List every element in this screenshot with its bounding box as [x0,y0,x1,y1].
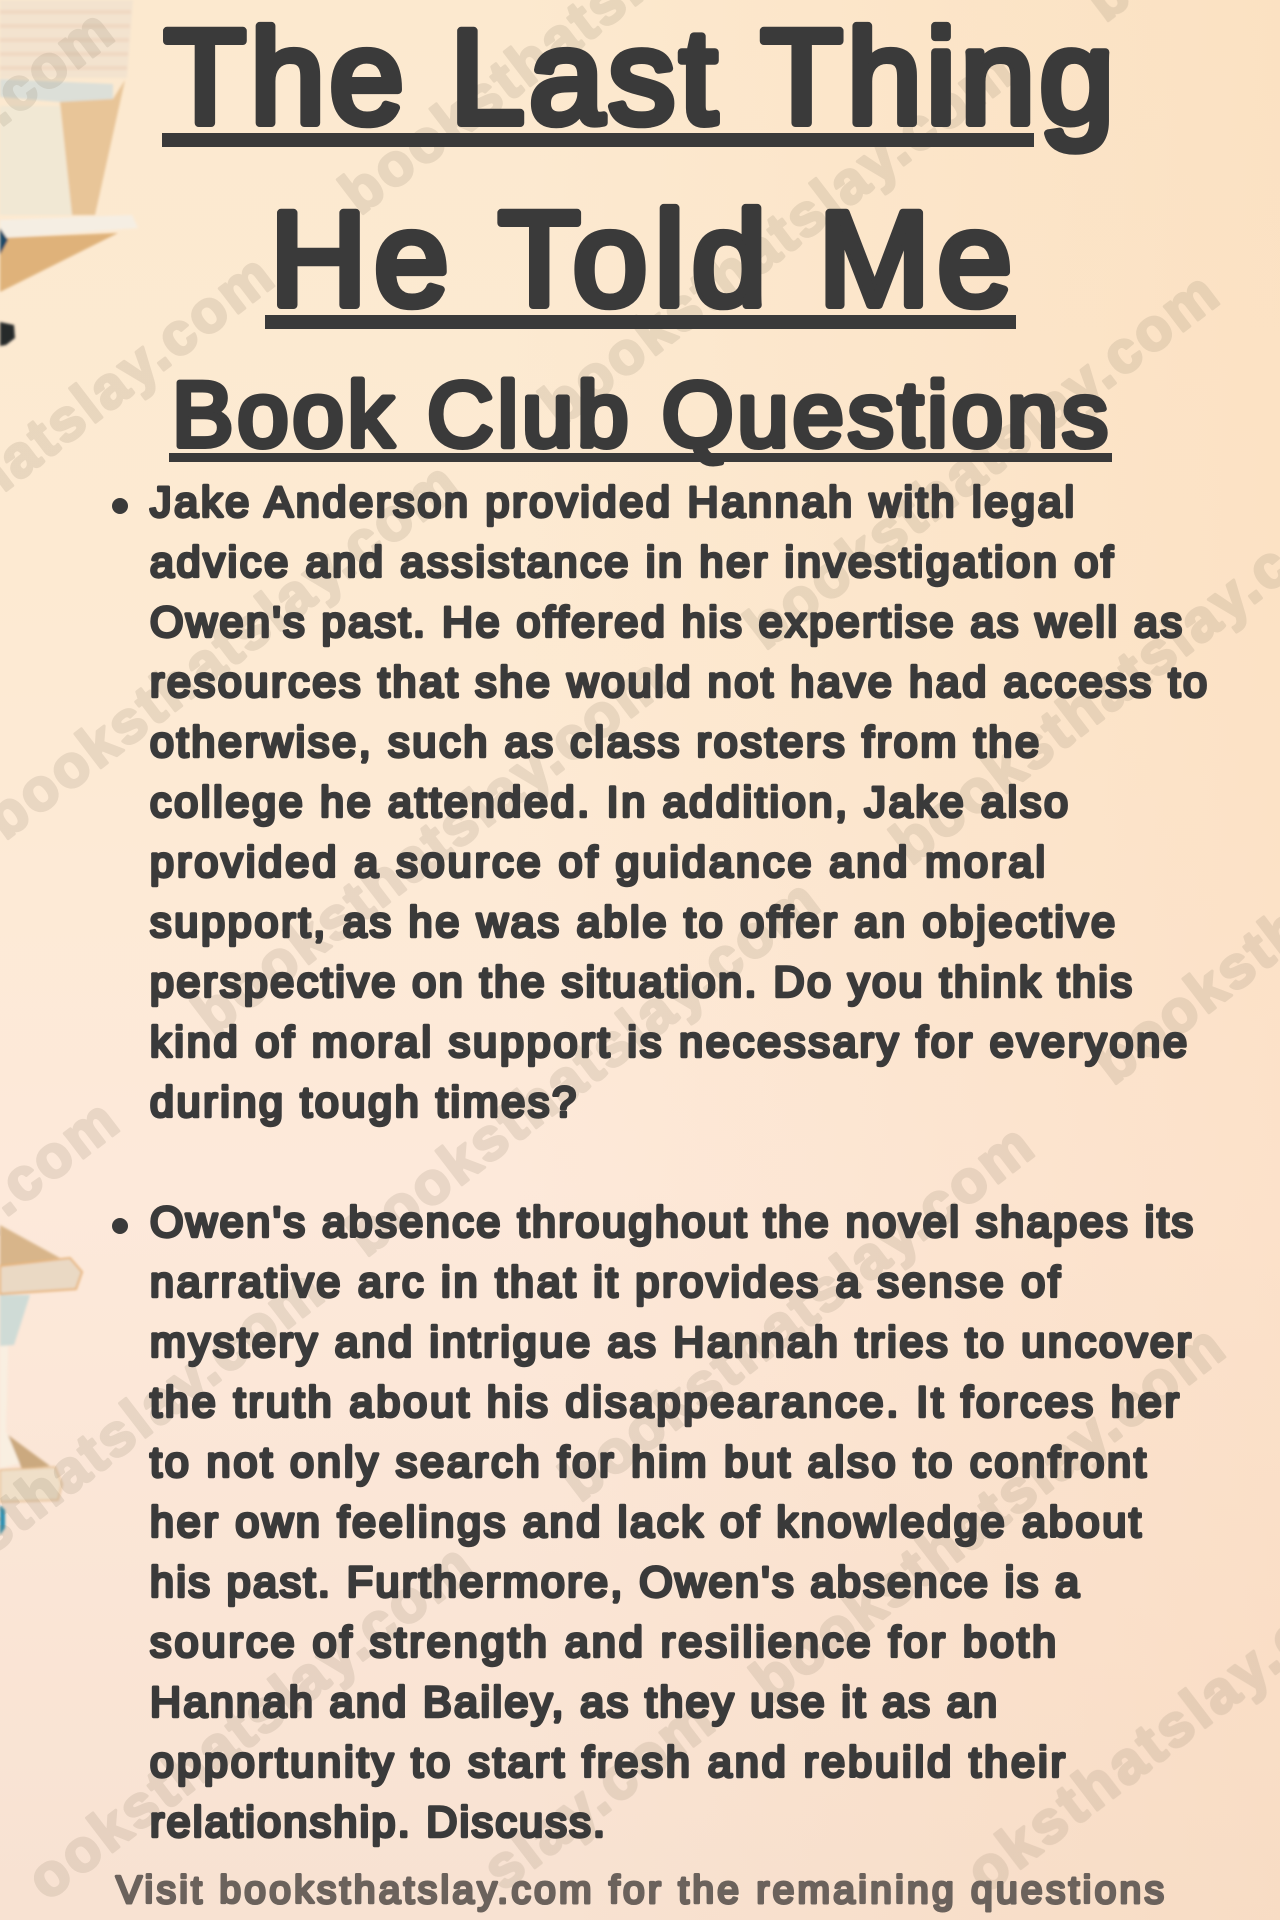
subtitle: Book Club Questions [172,364,1108,466]
footer call to action: Visit booksthatslay.com for the remaining questions [116,1869,1164,1912]
watermark pattern: booksthatslay.com [334,867,831,1268]
question 1: otherwise, such as class rosters from the [150,718,1039,766]
watermark pattern: booksthatslay.com [528,37,1025,438]
question 1: resources that she would not have had access to [150,658,1207,706]
title line 2: He Told Me [270,185,1012,334]
watermark pattern: slay.com [471,1686,725,1902]
question 2: opportunity to start fresh and rebuild their [150,1738,1065,1786]
image: stacked books top left [0,0,138,346]
image: stacked books lower left [0,1225,82,1535]
question 2: Owen's absence throughout the novel shapes its [150,1198,1193,1246]
watermark pattern: booksthatslay.com [181,646,678,1047]
question 1 [112,478,1207,1126]
question 1: support, as he was able to offer an objective [150,898,1115,946]
question 1: kind of moral support is necessary for everyone [150,1018,1187,1066]
question 1: advice and assistance in her investigation of [150,538,1114,586]
question 2: the truth about his disappearance. It forces her [150,1378,1179,1426]
question 1: provided a source of guidance and moral [150,838,1045,886]
question 2: his past. Furthermore, Owen's absence is a [150,1558,1079,1606]
bullet [112,498,128,514]
watermark pattern: booksthatslay.com [733,260,1230,661]
question 2: narrative arc in that it provides a sense of [150,1258,1061,1306]
watermark pattern: booksthatslay.com [739,1313,1236,1714]
title line 1: The Last Thing [164,3,1114,152]
question 2: mystery and intrigue as Hannah tries to uncover [150,1318,1191,1366]
question 1: during tough times? [150,1078,576,1126]
question 2: to not only search for him but also to confront [150,1438,1146,1486]
watermark pattern: booksthatslay.com [548,1112,1045,1513]
bullet [112,1218,128,1234]
question 2: source of strength and resilience for both [150,1618,1056,1666]
question 1: perspective on the situation. Do you think this [150,958,1132,1006]
question 2: relationship. Discuss. [150,1798,605,1846]
question 2 [112,1198,1193,1846]
question 1: Owen's past. He offered his expertise as well as [150,598,1182,646]
question 2: her own feelings and lack of knowledge about [150,1498,1141,1546]
watermark pattern: ooksthatslay.com [15,1531,485,1912]
question 2: Hannah and Bailey, as they use it as an [150,1678,997,1726]
question 1: Jake Anderson provided Hannah with legal [150,478,1074,526]
question 1: college he attended. In addition, Jake also [150,778,1068,826]
